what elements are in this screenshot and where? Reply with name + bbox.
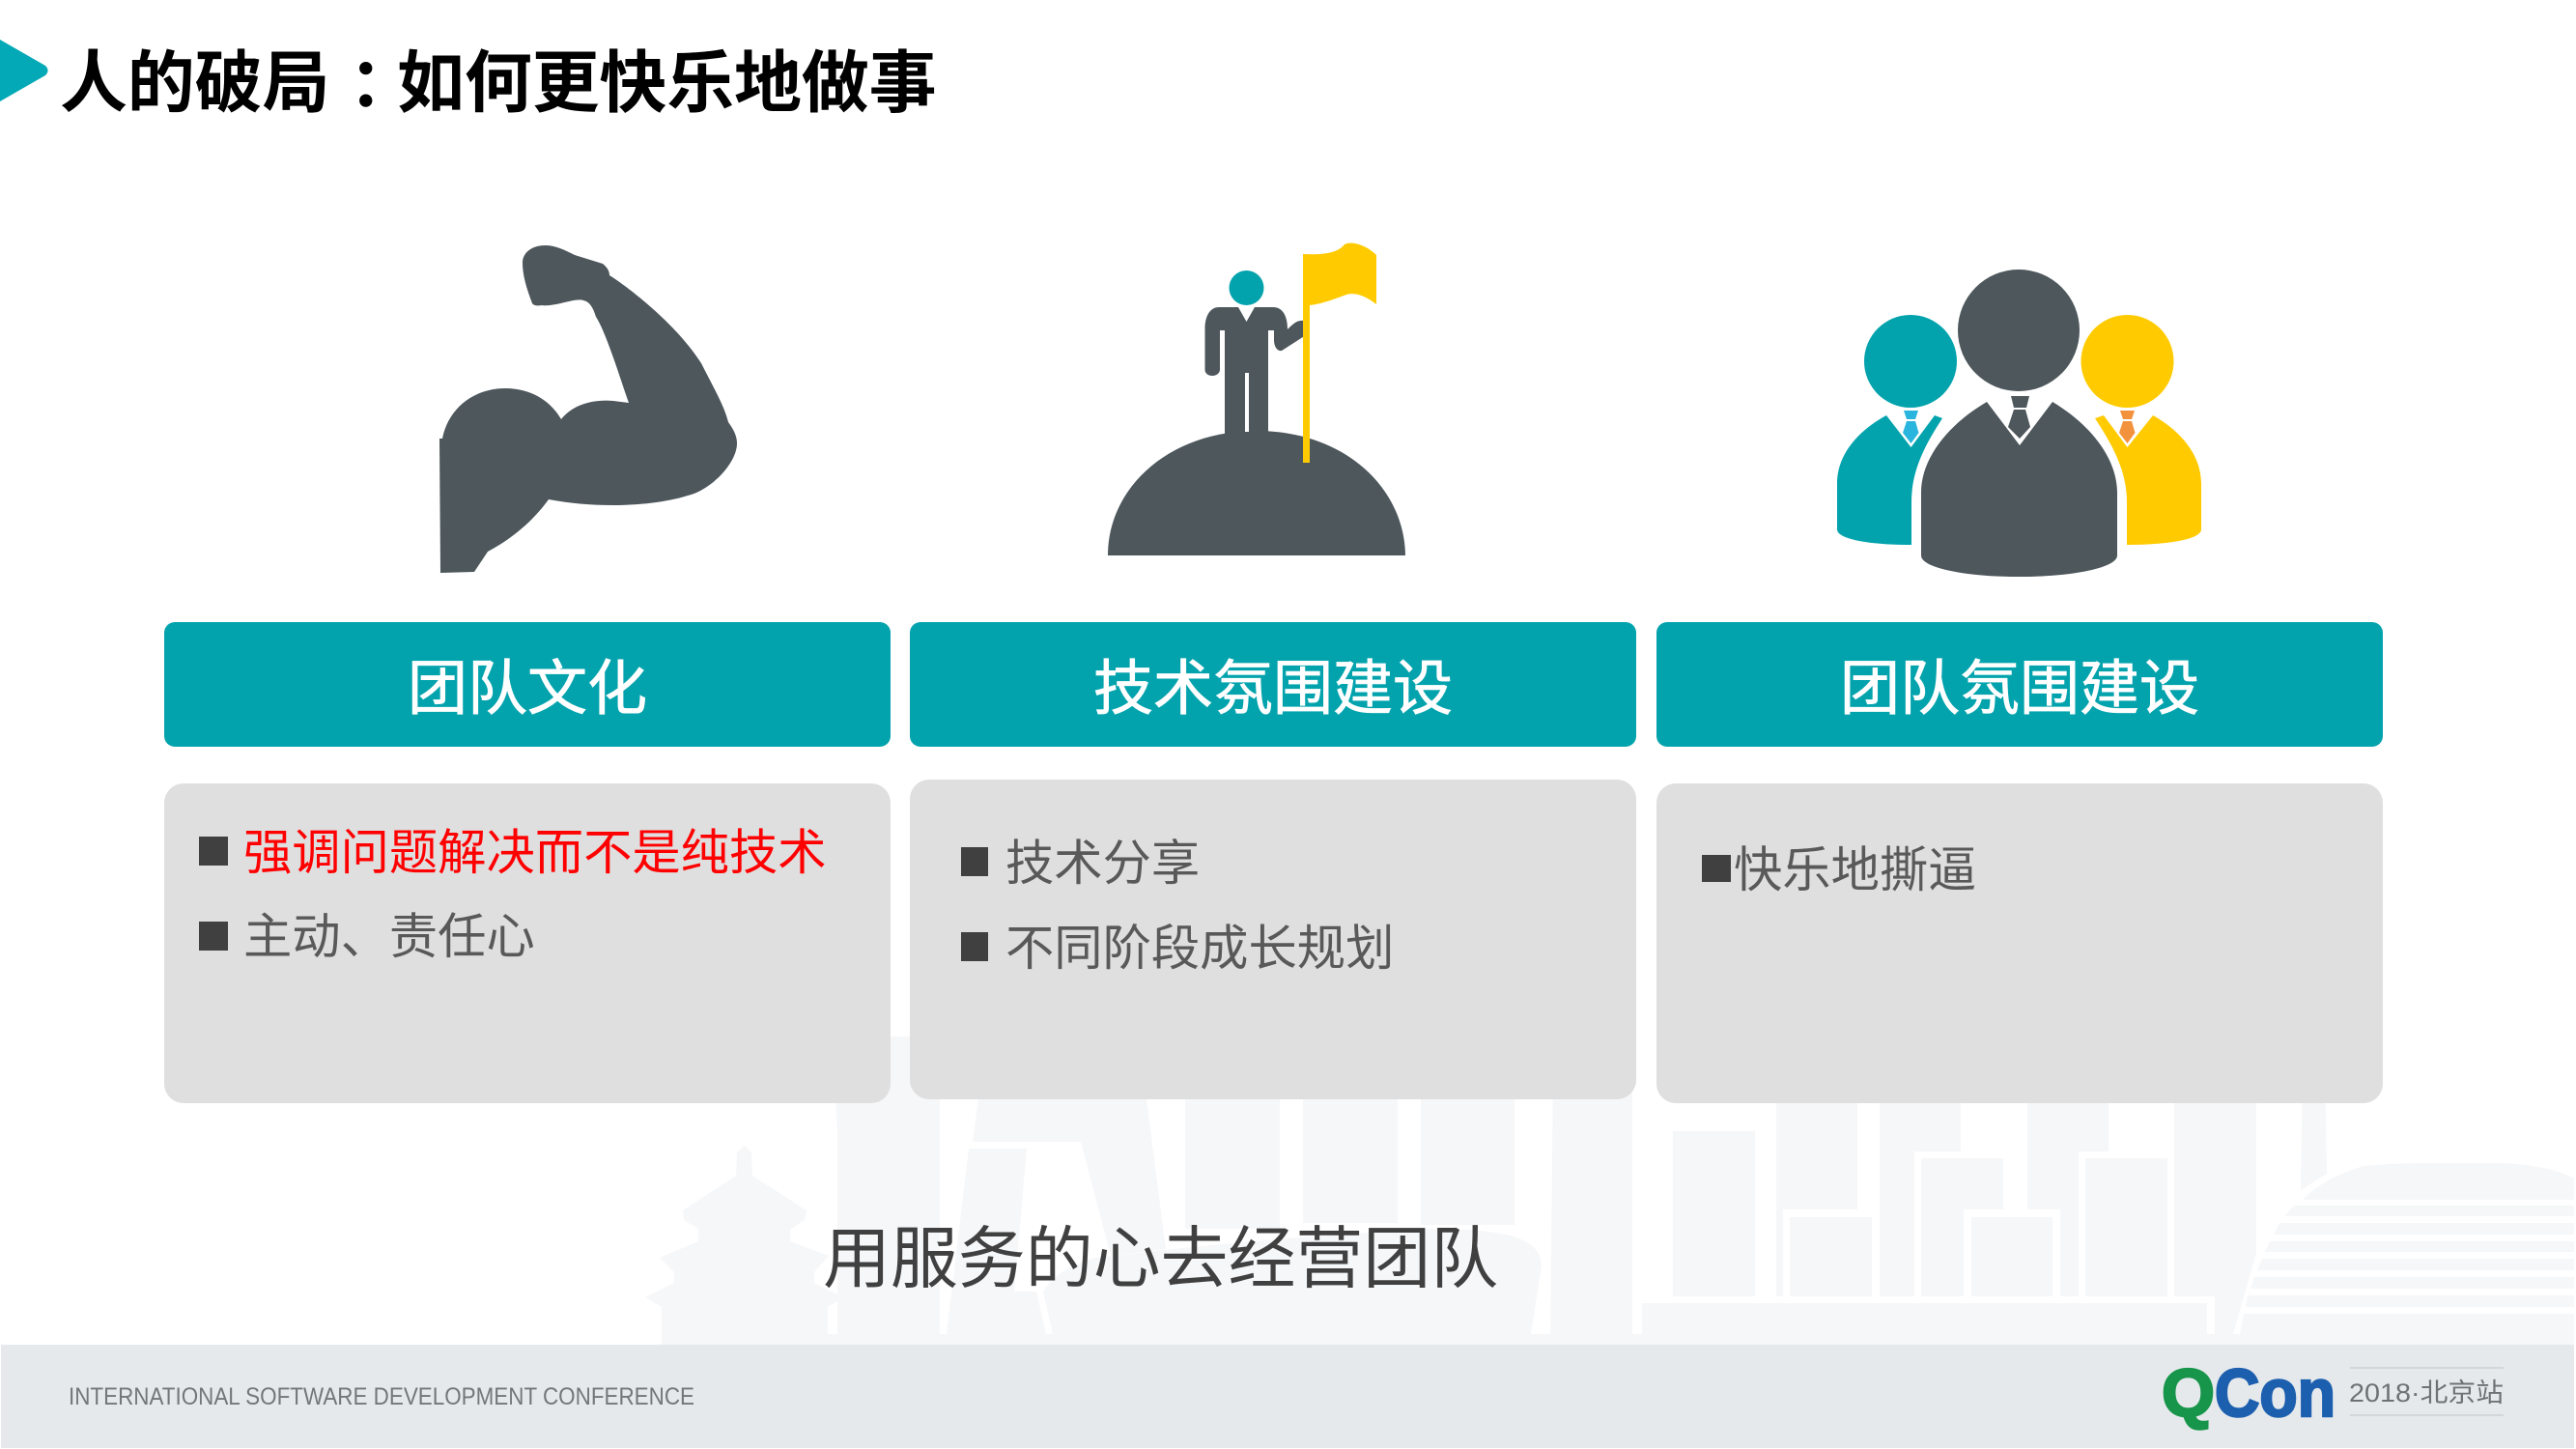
right person	[2081, 315, 2201, 545]
item: 快乐地撕逼	[1734, 842, 1976, 897]
highlighted item: 强调问题解决而不是纯技术	[243, 825, 827, 880]
item: 主动、责任心	[243, 909, 535, 964]
header: 团队氛围建设	[1656, 622, 2383, 747]
header: 技术氛围建设: 技术氛围建设	[1093, 656, 1453, 723]
header: 团队文化	[164, 622, 891, 747]
panel: team atmosphere	[1656, 783, 2383, 1103]
item: 不同阶段成长规划	[1005, 921, 1394, 976]
logo: QCon 2018 Beijing: Con	[2215, 1355, 2335, 1431]
hill	[1108, 431, 1405, 555]
center person	[1921, 270, 2117, 577]
icon: title arrow	[0, 40, 48, 101]
header: 团队氛围建设: 团队氛围建设	[1840, 656, 2199, 723]
icon: person with flag on hill	[1108, 243, 1405, 555]
closing statement: 用服务的心去经营团队	[823, 1221, 1498, 1296]
header: 技术氛围建设	[910, 622, 1636, 747]
logo: QCon 2018 Beijing: Q	[2162, 1355, 2215, 1431]
item: 技术分享	[1005, 836, 1200, 891]
person body	[1205, 307, 1309, 437]
logo: QCon 2018 Beijing: 2018·北京站	[2349, 1378, 2504, 1407]
panel: team culture	[164, 783, 891, 1103]
footer conference text: INTERNATIONAL SOFTWARE DEVELOPMENT CONFERENCE	[69, 1383, 694, 1410]
flag	[1303, 243, 1376, 463]
header: 团队文化: 团队文化	[408, 656, 647, 723]
icon: team of three people	[1837, 270, 2201, 577]
panel: tech atmosphere	[910, 780, 1636, 1099]
footer bar	[1, 1345, 2574, 1448]
person head	[1229, 270, 1263, 305]
title: 人的破局 ：如何更快乐地做事	[60, 45, 936, 121]
icon: flexed arm	[439, 245, 737, 573]
left person	[1837, 315, 1957, 545]
